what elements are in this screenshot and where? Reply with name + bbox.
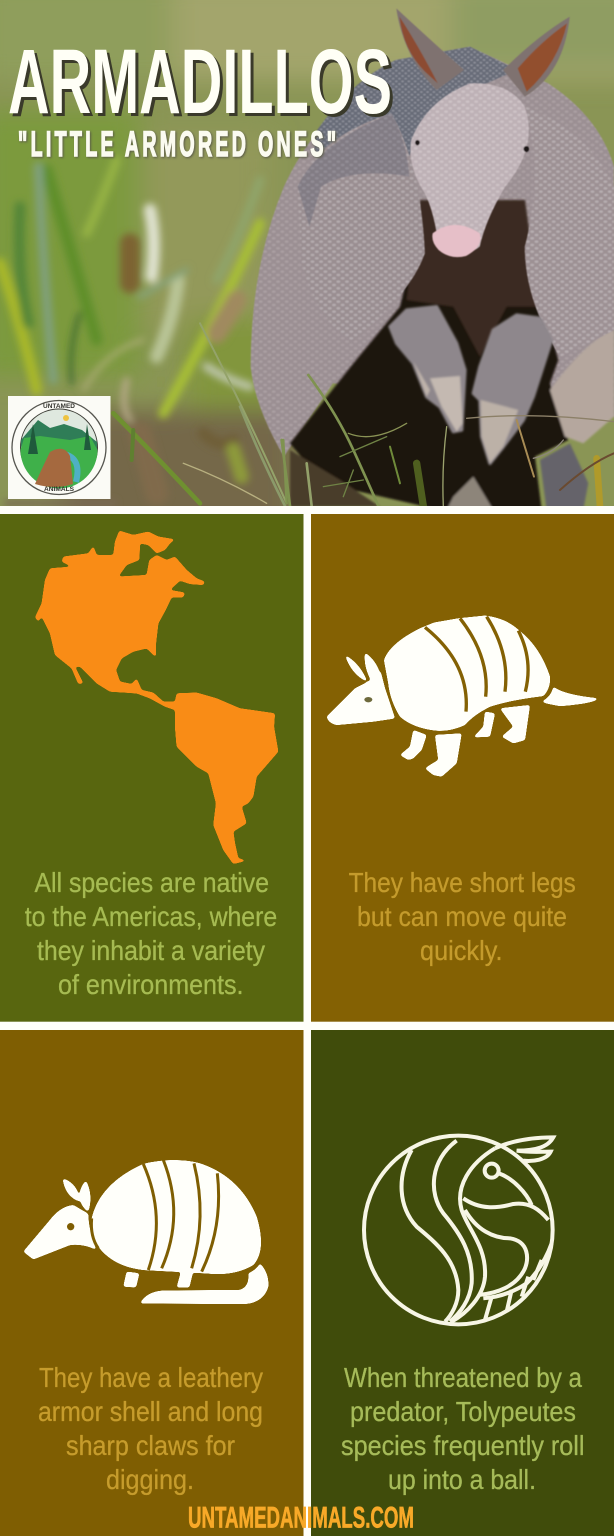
- footer website: untamedanimals.com: UNTAMEDANIMALS.COM: [188, 1502, 414, 1534]
- icon: map of the Americas: [35, 531, 278, 864]
- text: rolls into a ball: predator, Tolypeutes: [350, 1396, 576, 1427]
- text: leathery armor: armor shell and long: [38, 1396, 263, 1427]
- text: leathery armor: They have a leathery: [39, 1362, 263, 1393]
- icon: armadillo side view: [23, 1160, 268, 1304]
- icon: walking armadillo: [327, 616, 598, 777]
- text: native to the Americas: All species are native: [34, 867, 269, 898]
- text: native to the Americas: of environments.: [58, 969, 244, 1000]
- text: native to the Americas: they inhabit a variety: [37, 935, 265, 966]
- logo badge: Untamed Animals: [8, 396, 110, 499]
- text: native to the Americas: [25, 867, 277, 1000]
- text: leathery armor: sharp claws for: [66, 1430, 235, 1461]
- text: short legs: but can move quite: [357, 901, 567, 932]
- panel: rolls into a ball: [311, 1030, 614, 1536]
- armadillo front legs and claws: [390, 307, 552, 463]
- armadillo shoulder shells: [298, 107, 614, 357]
- subtitle: Little Armored Ones: "LITTLE ARMORED ONES": [18, 125, 336, 165]
- text: rolls into a ball: up into a ball.: [388, 1464, 536, 1495]
- dark belly: [290, 200, 614, 510]
- icon: armadillo rolled into a ball: [364, 1136, 553, 1324]
- text: leathery armor: digging.: [106, 1464, 194, 1495]
- panel: short legs: [311, 514, 614, 1022]
- armadillo rear shell: [251, 47, 614, 457]
- hero photo: armadillo in grass: [0, 0, 614, 543]
- foreground grass: [240, 375, 614, 506]
- panel: native to the Americas: [0, 514, 304, 1022]
- text: rolls into a ball: [341, 1362, 584, 1495]
- text: leathery armor: [38, 1362, 263, 1495]
- text: short legs: [349, 867, 576, 966]
- text: rolls into a ball: species frequently roll: [341, 1430, 584, 1461]
- text: short legs: They have short legs: [349, 867, 576, 898]
- logo badge: Untamed Animals: ANIMALS: [44, 487, 74, 493]
- armadillo ears: [396, 8, 570, 97]
- text: short legs: quickly.: [420, 935, 502, 966]
- armadillo head: [410, 83, 529, 257]
- text: native to the Americas: to the Americas, where: [25, 901, 277, 932]
- panel: leathery armor: [0, 1030, 304, 1536]
- text: rolls into a ball: When threatened by a: [344, 1362, 582, 1393]
- logo badge: Untamed Animals: UNTAMED: [43, 404, 76, 410]
- title: ARMADILLOS: ARMADILLOS: [8, 31, 392, 133]
